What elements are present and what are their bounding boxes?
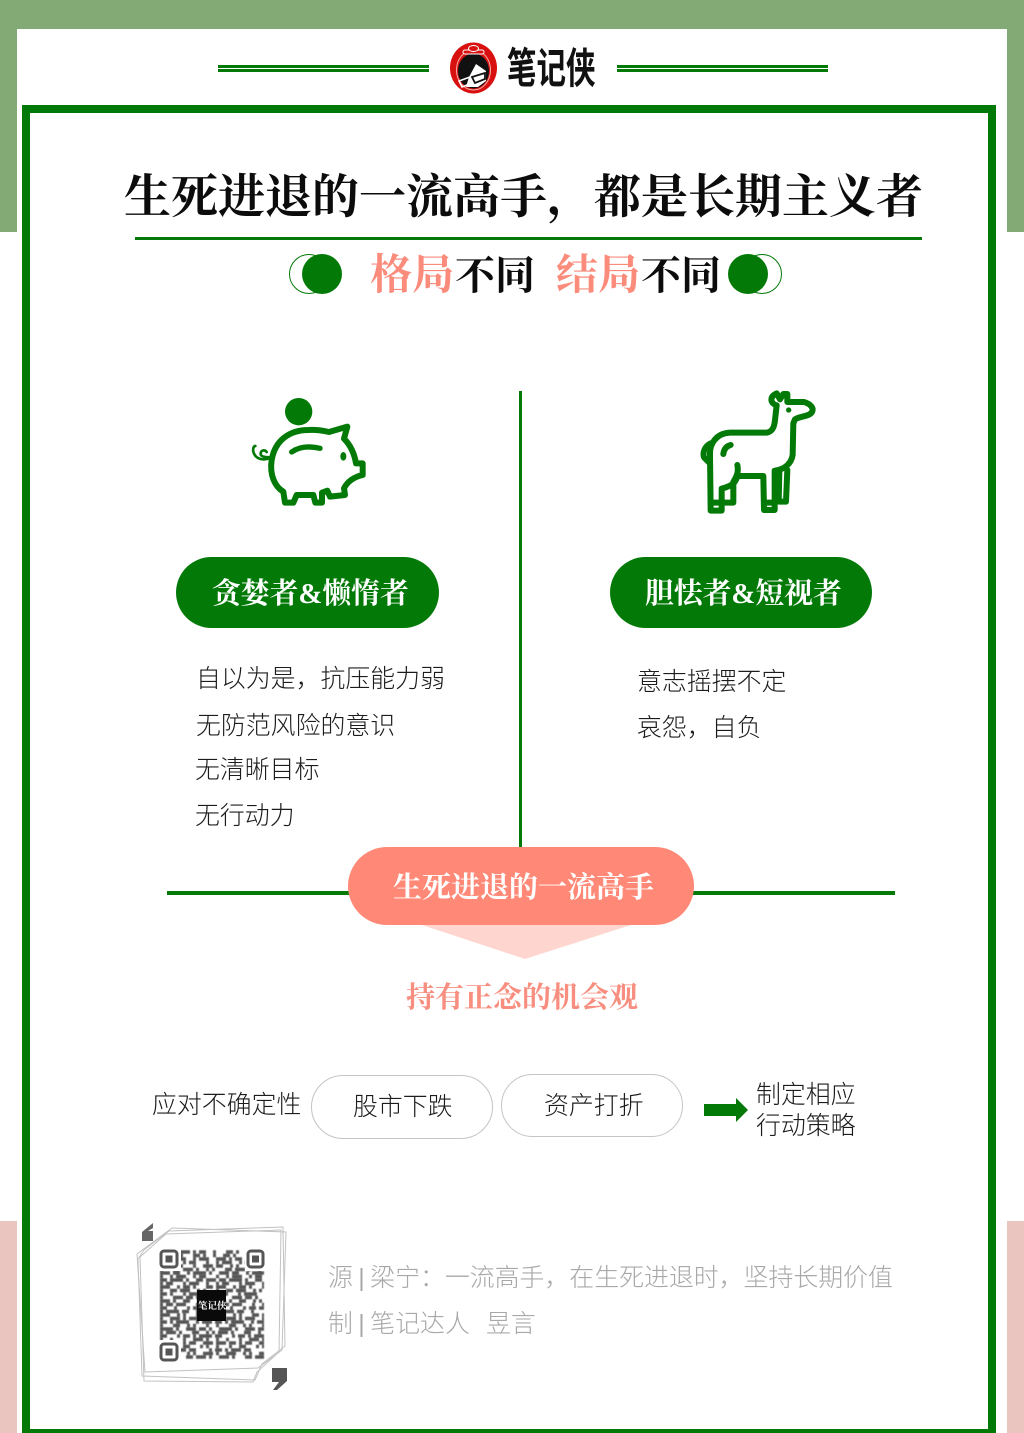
option pill: asset discount <box>501 1074 683 1137</box>
icon: left moon <box>289 254 342 294</box>
pill: left heading <box>176 557 439 628</box>
quote mark: open <box>142 1223 153 1241</box>
logo wordmark: 笔记侠 <box>507 46 596 93</box>
quote mark: close <box>272 1368 287 1390</box>
left list: 无清晰目标 <box>195 756 319 784</box>
source text: 源 | 梁宁：一流高手，在生死进退时，坚持长期价值 <box>328 1264 893 1292</box>
background: green top band <box>0 0 1024 232</box>
action text <box>756 1081 856 1140</box>
pill text: right heading: 胆怯者&短视者 <box>645 578 842 610</box>
option pill: market fall <box>311 1075 493 1139</box>
QR code block: 笔记侠 <box>198 1300 227 1312</box>
uncertainty label: 应对不确定性 <box>152 1091 301 1119</box>
title underline <box>135 237 922 240</box>
vertical divider <box>519 391 522 849</box>
background: pink bottom band <box>0 1221 1024 1433</box>
right list <box>637 668 786 742</box>
callout pill <box>348 847 694 925</box>
horizontal divider right <box>685 891 895 895</box>
source text: 制 | 笔记达人 昱言 <box>328 1310 536 1338</box>
right list: 意志摇摆不定 <box>637 668 786 696</box>
icon: right moon <box>728 254 782 294</box>
pill text: left heading: 贪婪者&懒惰者 <box>212 578 409 610</box>
left list: 无防范风险的意识 <box>196 712 395 740</box>
left list <box>195 665 445 830</box>
action text: 制定相应 <box>756 1081 856 1109</box>
QR modules <box>160 1252 264 1357</box>
QR code block <box>136 1223 287 1390</box>
header divider right <box>617 65 828 72</box>
subtitle: 格局不同: 格局不同 <box>370 253 535 299</box>
right list: 哀怨，自负 <box>637 714 761 742</box>
source text <box>328 1264 893 1338</box>
header divider left <box>218 65 429 72</box>
pill: right heading <box>610 557 872 628</box>
left list: 无行动力 <box>195 802 295 830</box>
option text: asset discount: 资产打折 <box>544 1092 644 1120</box>
subtitle: 结局不同: 结局不同 <box>556 253 721 299</box>
callout arrow <box>422 925 630 959</box>
action text: 行动策略 <box>756 1112 856 1140</box>
option text: market fall: 股市下跌 <box>353 1093 453 1121</box>
title: 生死进退的一流高手，都是长期主义者 <box>124 172 923 224</box>
icon: piggy bank <box>252 398 366 506</box>
arrow <box>704 1098 748 1122</box>
icon: brand logo <box>450 42 497 94</box>
icon: llama <box>700 390 816 514</box>
conclusion text: 持有正念的机会观 <box>406 982 638 1014</box>
callout text: 生死进退的一流高手 <box>393 872 654 904</box>
horizontal divider left <box>167 891 357 895</box>
left list: 自以为是，抗压能力弱 <box>196 665 445 693</box>
